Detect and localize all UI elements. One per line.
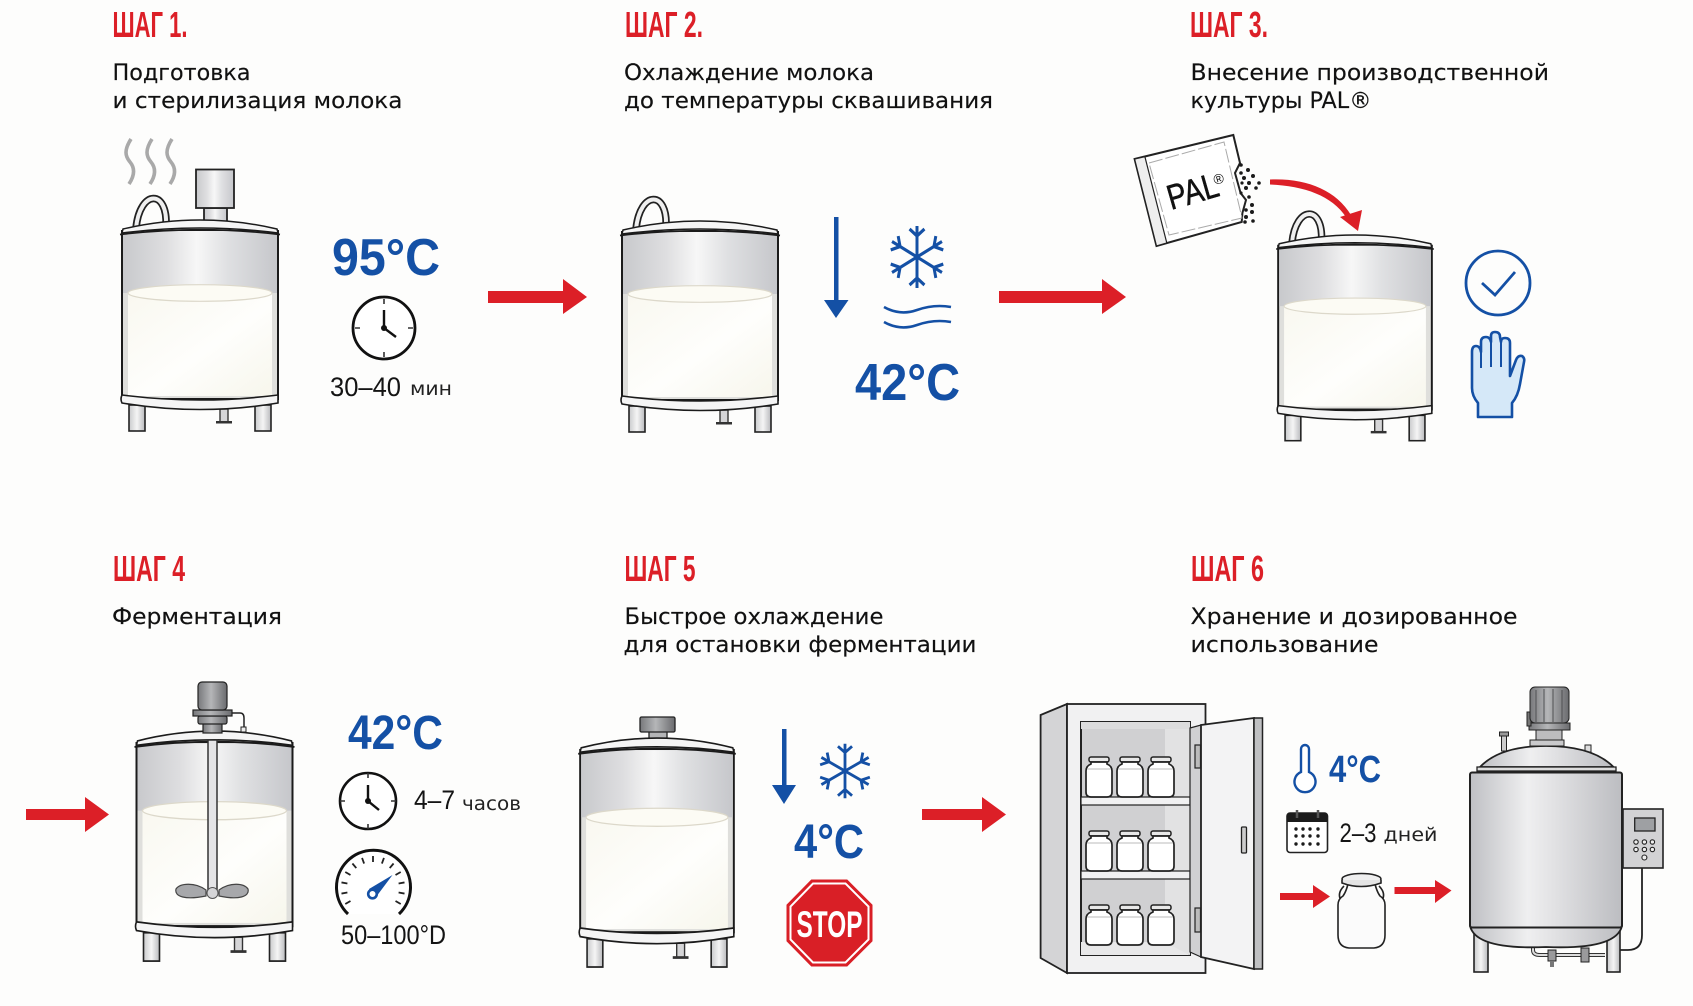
step 2 heading: ШАГ 2. bbox=[625, 4, 703, 45]
icon: snowflake bbox=[888, 226, 946, 288]
tank bbox=[620, 199, 780, 432]
duration 2–3 дней bbox=[1340, 818, 1438, 848]
step 6 heading: ШАГ 6 bbox=[1191, 548, 1264, 589]
duration 4–7 часов: 4–7 bbox=[414, 785, 455, 815]
icon: clock bbox=[353, 297, 415, 359]
duration 4–7 часов: часов bbox=[462, 793, 521, 815]
PAL culture sachet bbox=[1135, 135, 1261, 246]
tank bbox=[1276, 214, 1434, 441]
duration 4–7 часов bbox=[414, 785, 521, 815]
arrow: culture into tank bbox=[1270, 179, 1362, 231]
panel: step 6 bbox=[1041, 548, 1663, 973]
arrow: to milk can bbox=[1280, 885, 1330, 908]
icon: acidity gauge bbox=[336, 850, 410, 914]
acidity 50–100°D: 50–100°D bbox=[341, 920, 446, 950]
arrow: step 1 to 2 bbox=[488, 279, 587, 314]
step 2 description: Охлаждение молока bbox=[624, 60, 874, 86]
temperature 4°C: 4°C bbox=[1329, 749, 1381, 791]
step 5 description bbox=[624, 604, 976, 658]
temperature 42°C: 42°C bbox=[855, 354, 960, 412]
icon: stop sign: STOP bbox=[796, 904, 862, 945]
step 1 heading: ШАГ 1. bbox=[112, 4, 188, 45]
panel: step 4 bbox=[26, 548, 521, 961]
step 1 description bbox=[112, 60, 402, 114]
arrow: temperature down bbox=[772, 729, 796, 804]
step 1 description: и стерилизация молока bbox=[112, 88, 402, 114]
step 2 description bbox=[624, 60, 993, 114]
panel: step 2 bbox=[620, 4, 993, 432]
step 3 heading: ШАГ 3. bbox=[1190, 4, 1268, 45]
step 2 description: до температуры сквашивания bbox=[624, 88, 993, 114]
step 3 description: культуры PAL® bbox=[1190, 88, 1372, 114]
step 5 heading: ШАГ 5 bbox=[624, 548, 696, 589]
panel: step 5 bbox=[578, 548, 976, 967]
icon: check mark bbox=[1466, 251, 1530, 315]
icon: stop sign bbox=[787, 880, 872, 966]
step 5 description: Быстрое охлаждение bbox=[624, 604, 884, 630]
arrow: step 5 to 6 bbox=[922, 797, 1006, 832]
step 6 description: использование bbox=[1190, 632, 1378, 658]
duration 30–40 мин: мин bbox=[410, 378, 452, 400]
step 4 heading: ШАГ 4 bbox=[113, 548, 185, 589]
temperature 42°C: 42°C bbox=[348, 707, 443, 760]
arrow: to dosing tank bbox=[1394, 880, 1452, 903]
icon: snowflake bbox=[818, 744, 872, 798]
step 6 description: Хранение и дозированное bbox=[1190, 604, 1518, 630]
arrow: temperature down bbox=[824, 217, 848, 318]
refrigerator with jars bbox=[1041, 704, 1262, 973]
mixing tank with control panel bbox=[1470, 687, 1663, 972]
fermentation tank with agitator bbox=[134, 682, 294, 961]
panel: step 1 bbox=[112, 4, 452, 431]
icon: clock bbox=[340, 773, 396, 829]
step 5 description: для остановки ферментации bbox=[624, 632, 976, 658]
duration 2–3 дней: 2–3 bbox=[1340, 818, 1376, 848]
arrow: into step 4 bbox=[26, 797, 109, 832]
step 3 description: Внесение производственной bbox=[1190, 60, 1549, 86]
icon: sterile glove bbox=[1472, 332, 1524, 417]
icon: steam bbox=[126, 139, 175, 184]
duration 2–3 дней: дней bbox=[1384, 824, 1438, 846]
tank with lid unit bbox=[120, 170, 280, 431]
step 6 description bbox=[1190, 604, 1518, 658]
step 1 description: Подготовка bbox=[112, 60, 250, 86]
icon: calendar bbox=[1287, 810, 1328, 852]
temperature 4°C: 4°C bbox=[794, 816, 864, 869]
icon: cold waves bbox=[884, 306, 951, 327]
icon: milk can bbox=[1338, 874, 1385, 948]
duration 30–40 мин bbox=[330, 372, 452, 402]
panel: step 3 bbox=[1135, 4, 1549, 441]
tank with cap bbox=[578, 717, 736, 967]
PAL culture sachet: ® bbox=[1211, 169, 1226, 188]
step 4 description: Ферментация bbox=[112, 604, 282, 630]
step 3 description bbox=[1190, 60, 1549, 114]
temperature 95°C: 95°C bbox=[332, 229, 440, 287]
arrow: step 2 to 3 bbox=[999, 279, 1126, 314]
icon: thermometer bbox=[1295, 745, 1316, 792]
PAL culture sachet: PAL bbox=[1162, 166, 1223, 218]
duration 30–40 мин: 30–40 bbox=[330, 372, 401, 402]
